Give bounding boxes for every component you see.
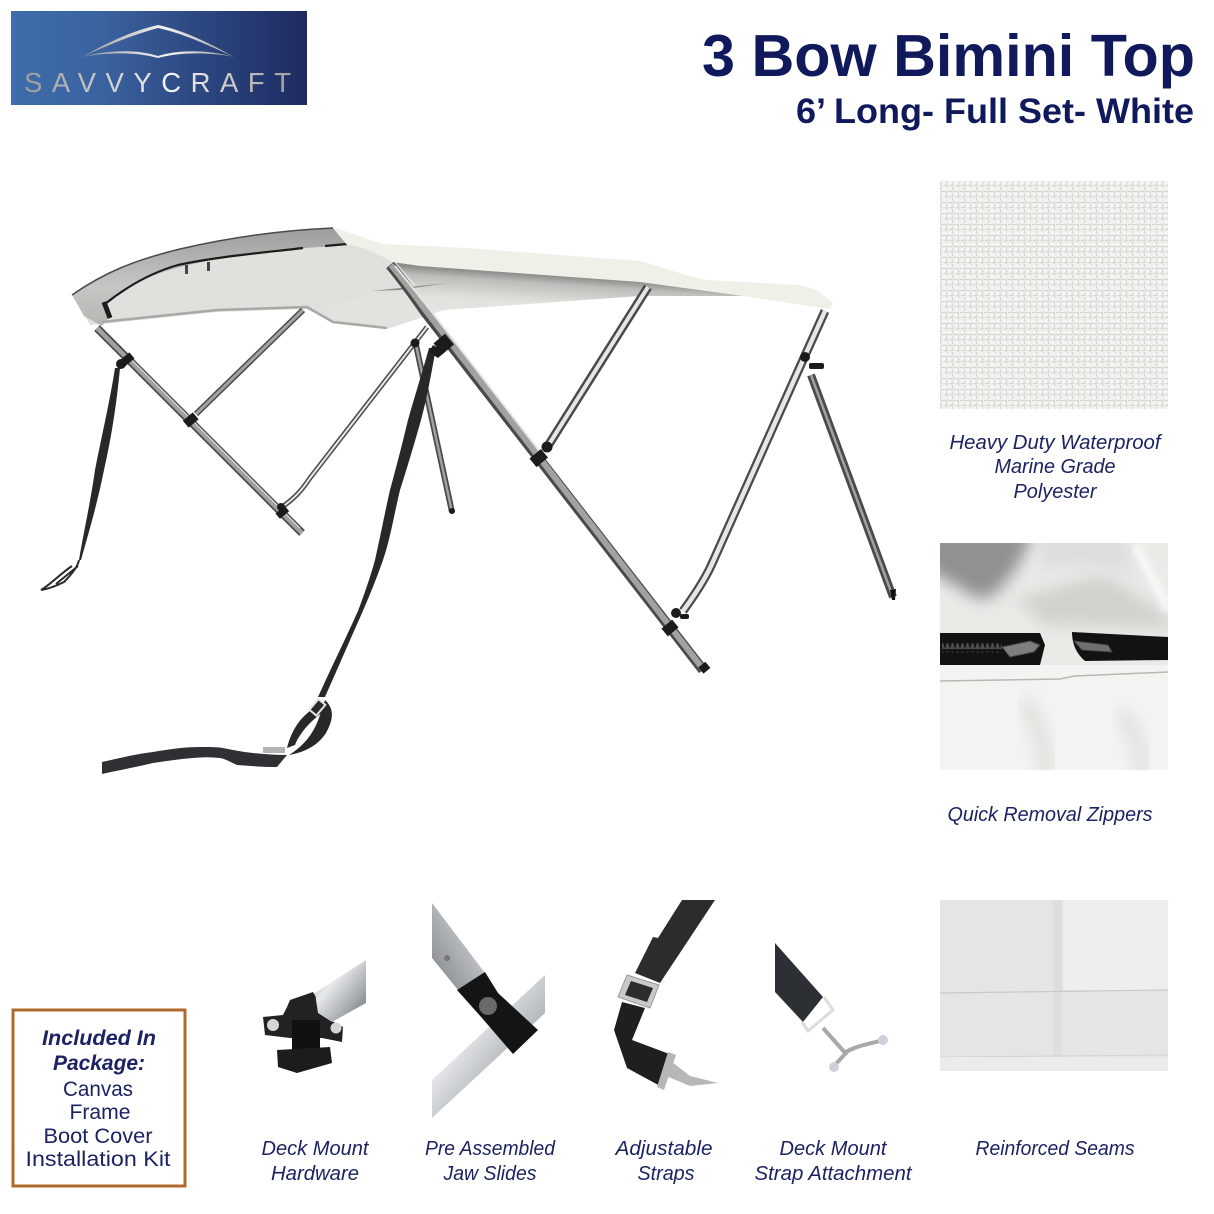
subtitle: 6’ Long- Full Set- White: [796, 92, 1194, 131]
large strap: [102, 348, 436, 774]
caption: deck mount hardware: [262, 1138, 370, 1185]
panel: included in package: Package:: [53, 1052, 145, 1075]
caption: polyester: Polyester: [1014, 481, 1098, 503]
caption: adjustable straps: Straps: [638, 1163, 694, 1185]
thumbnail: deck mount strap attachment: [775, 943, 888, 1072]
caption: strap attachment: Strap Attachment: [754, 1163, 913, 1185]
panel: included in package: Boot Cover: [44, 1125, 152, 1148]
panel: included in package: Frame: [70, 1101, 130, 1124]
underside rear panel: [322, 258, 743, 329]
title: 3 Bow Bimini Top: [702, 23, 1195, 89]
caption: jaw slides: [425, 1138, 556, 1185]
caption: deck mount hardware: Hardware: [271, 1163, 359, 1185]
panel: included in package: Installation Kit: [26, 1148, 171, 1171]
right leg: [811, 375, 893, 597]
rear short leg and left strap: [41, 345, 455, 590]
caption: deck mount hardware: Deck Mount: [262, 1138, 370, 1160]
caption: polyester: Marine Grade: [994, 456, 1116, 478]
canopy rim: [72, 228, 350, 326]
zipper line: [105, 244, 347, 304]
panel: included in package: Canvas: [63, 1078, 133, 1101]
swatch: reinforced seams: [940, 900, 1168, 1071]
caption: strap attachment: Deck Mount: [780, 1138, 888, 1160]
rear bent bow, left: [282, 327, 427, 507]
thumbnail: jaw slides: [432, 903, 545, 1118]
caption: seams: Reinforced Seams: [976, 1138, 1134, 1160]
caption: zippers: Quick Removal Zippers: [948, 804, 1152, 826]
strut, center: [546, 287, 648, 449]
panel: included in package: [13, 1010, 185, 1186]
swatch: polyester weave: [940, 181, 1168, 409]
canopy top: [333, 228, 833, 309]
thumbnail: adjustable straps: [614, 900, 718, 1090]
caption: jaw slides: Jaw Slides: [443, 1163, 536, 1185]
icon: logo roof arc: [82, 25, 234, 58]
logo: Savvycraft: [11, 11, 307, 105]
main tube: [390, 265, 703, 670]
canopy underside: [73, 229, 743, 329]
caption: polyester: [950, 432, 1163, 503]
title: [702, 23, 1195, 131]
rear bent bow, right: [683, 311, 825, 611]
caption: adjustable straps: [614, 1138, 712, 1185]
strut, left: [196, 310, 303, 414]
main product: bimini top: [41, 228, 896, 774]
caption: strap attachment: [754, 1138, 913, 1185]
swatch: zippers: [940, 543, 1168, 770]
caption: jaw slides: Pre Assembled: [425, 1138, 556, 1160]
thumbnail: deck mount hardware: [263, 960, 366, 1073]
front bow, left: [97, 328, 302, 533]
panel: included in package: Included In: [42, 1027, 156, 1050]
jaw slides and fittings: [116, 334, 824, 674]
logo wordmark: SAVVYCRAFT: [24, 67, 291, 98]
caption: polyester: Heavy Duty Waterproof: [950, 432, 1163, 454]
caption: adjustable straps: Adjustable: [614, 1138, 712, 1160]
